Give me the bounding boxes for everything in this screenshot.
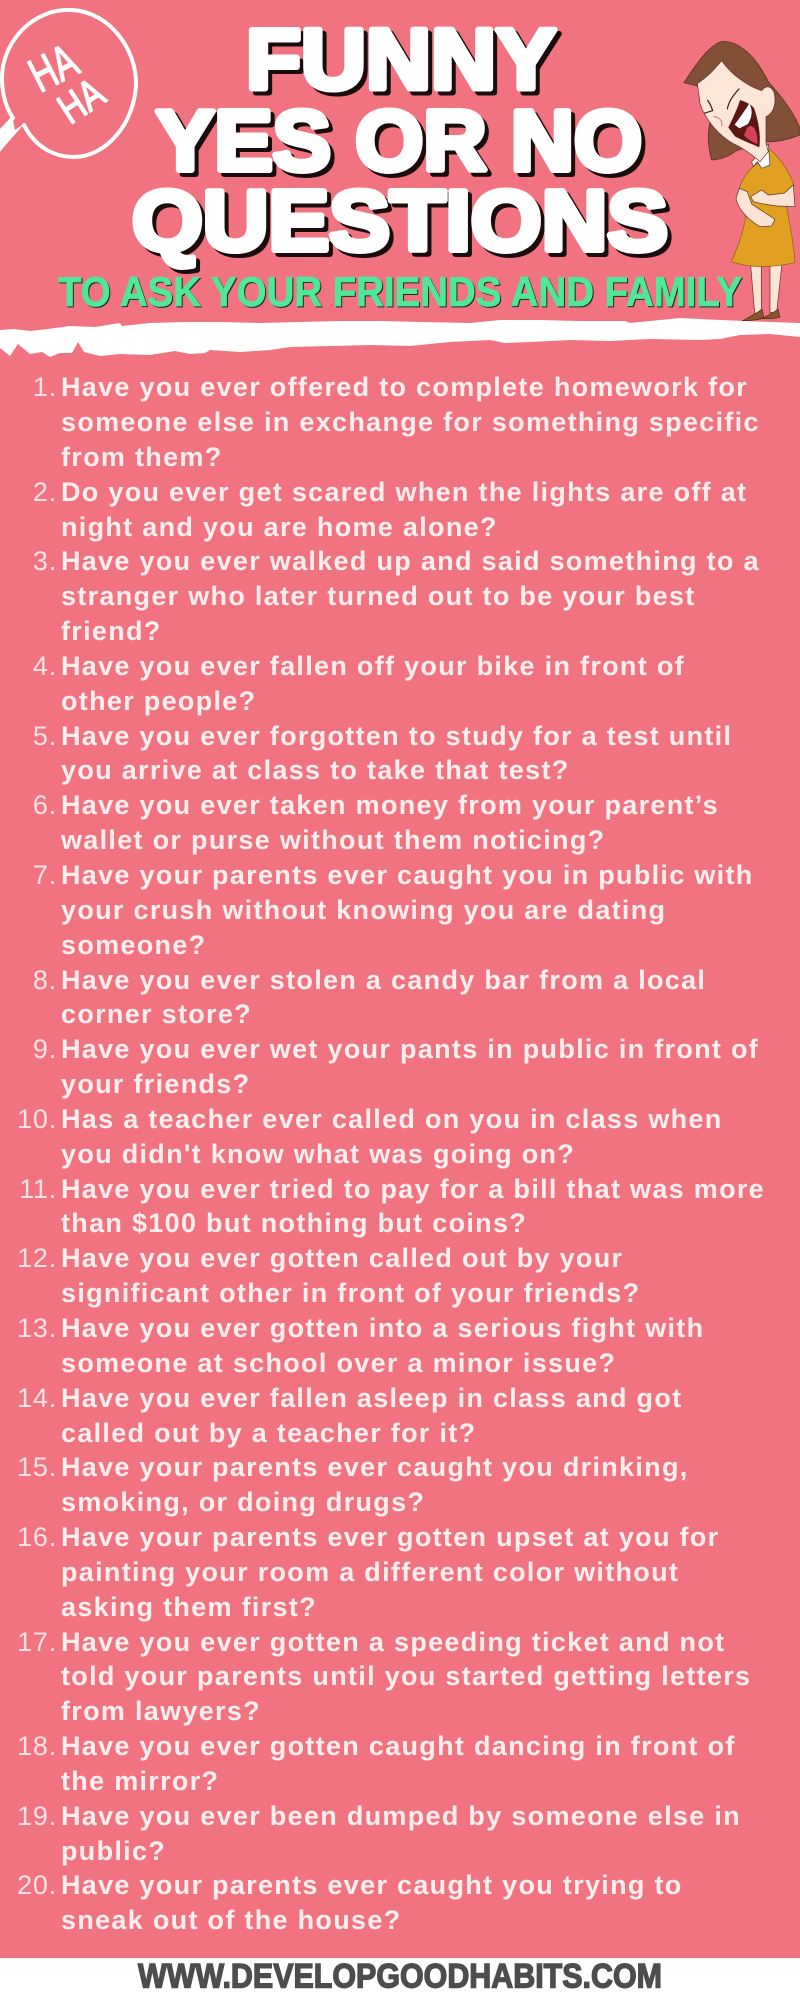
icon: HA HA speech bubble xyxy=(0,10,136,157)
question 10: Has a teacher ever called on you in class when xyxy=(61,1104,723,1134)
question 1: Have you ever offered to complete homework for xyxy=(61,372,748,402)
question 3: stranger who later turned out to be your best xyxy=(61,581,696,611)
question 5: 5. xyxy=(33,721,57,751)
question 8: 8. xyxy=(33,965,57,995)
question 4 xyxy=(33,651,685,716)
question 1 xyxy=(33,372,760,472)
question 9 xyxy=(33,1034,759,1099)
title: QUESTIONS xyxy=(132,174,668,269)
question 12: Have you ever gotten called out by your xyxy=(61,1243,623,1273)
question 15: Have your parents ever caught you drinking, xyxy=(61,1452,689,1482)
header artwork xyxy=(0,8,800,357)
arms xyxy=(736,188,775,227)
torn white paper strip xyxy=(0,318,800,357)
question 20: 20. xyxy=(17,1870,57,1900)
question 9: Have you ever wet your pants in public in front of xyxy=(61,1034,759,1064)
eyes xyxy=(704,89,739,113)
question 7: your crush without knowing you are dating xyxy=(61,895,666,925)
question 12: significant other in front of your friends? xyxy=(61,1278,640,1308)
shoes xyxy=(743,309,780,321)
question 16: asking them first? xyxy=(61,1592,317,1622)
question 19: 19. xyxy=(17,1801,57,1831)
icon: HA HA speech bubble: HA xyxy=(20,32,87,102)
question 16: painting your room a different color without xyxy=(61,1557,679,1587)
question 20 xyxy=(17,1870,683,1935)
question 7: someone? xyxy=(61,930,206,960)
question 11: Have you ever tried to pay for a bill that was more xyxy=(61,1174,765,1204)
question 15 xyxy=(17,1452,689,1517)
question 1: from them? xyxy=(61,442,222,472)
question 17 xyxy=(17,1627,751,1726)
question 17: Have you ever gotten a speeding ticket and not xyxy=(61,1627,725,1657)
question 13: someone at school over a minor issue? xyxy=(61,1348,616,1378)
question 7: Have your parents ever caught you in public with xyxy=(61,860,754,890)
footer website url: WWW.DEVELOPGOODHABITS.COM xyxy=(138,1958,662,1996)
question 11: than $100 but nothing but coins? xyxy=(61,1208,527,1238)
question 6: wallet or purse without them noticing? xyxy=(61,825,605,855)
title xyxy=(132,12,668,269)
question 7: 7. xyxy=(33,860,57,890)
question 2: Do you ever get scared when the lights are off at xyxy=(61,477,747,507)
question 7 xyxy=(33,860,754,960)
question 10: you didn't know what was going on? xyxy=(61,1139,575,1169)
question 20: Have your parents ever caught you trying to xyxy=(61,1870,683,1900)
questions list xyxy=(17,372,765,1935)
collar xyxy=(752,144,770,168)
question 12: 12. xyxy=(17,1243,57,1273)
question 4: 4. xyxy=(33,651,57,681)
legs xyxy=(751,263,782,313)
question 8 xyxy=(33,965,706,1029)
icon: laughing woman xyxy=(684,41,800,321)
title: FUNNY xyxy=(246,12,556,108)
teeth xyxy=(735,103,752,128)
question 1: 1. xyxy=(33,372,57,402)
question 5: Have you ever forgotten to study for a test until xyxy=(61,721,732,751)
question 10 xyxy=(17,1104,723,1169)
hair xyxy=(684,41,800,160)
dress xyxy=(731,149,795,266)
question 16 xyxy=(17,1522,719,1622)
question 6 xyxy=(33,790,719,855)
question 12 xyxy=(17,1243,640,1308)
question 3: Have you ever walked up and said something to a xyxy=(61,546,760,576)
question 14: called out by a teacher for it? xyxy=(61,1418,476,1448)
question 18: 18. xyxy=(17,1731,57,1761)
question 6: 6. xyxy=(33,790,57,820)
question 3: friend? xyxy=(61,616,162,646)
question 15: 15. xyxy=(17,1452,57,1482)
question 3 xyxy=(33,546,760,646)
question 5 xyxy=(33,721,732,785)
question 8: corner store? xyxy=(61,999,252,1029)
question 19: public? xyxy=(61,1836,166,1866)
question 17: told your parents until you started getting letters xyxy=(61,1661,751,1691)
question 2 xyxy=(33,477,747,542)
question 1: someone else in exchange for something specific xyxy=(61,407,760,437)
mouth xyxy=(728,100,760,147)
question 13 xyxy=(17,1313,704,1378)
tongue xyxy=(744,126,757,144)
question 14 xyxy=(17,1383,682,1448)
question 5: you arrive at class to take that test? xyxy=(61,755,570,785)
subtitle: TO ASK YOUR FRIENDS AND FAMILY xyxy=(58,268,742,315)
question 9: your friends? xyxy=(61,1069,250,1099)
question 18: Have you ever gotten caught dancing in front of xyxy=(61,1731,736,1761)
question 14: Have you ever fallen asleep in class and got xyxy=(61,1383,682,1413)
question 8: Have you ever stolen a candy bar from a local xyxy=(61,965,706,995)
question 13: Have you ever gotten into a serious fight with xyxy=(61,1313,704,1343)
title: YES OR NO xyxy=(156,94,642,189)
question 2: night and you are home alone? xyxy=(61,512,498,542)
face xyxy=(697,61,775,162)
question 3: 3. xyxy=(33,546,57,576)
question 19 xyxy=(17,1801,741,1866)
question 6: Have you ever taken money from your parent’s xyxy=(61,790,719,820)
question 11: 11. xyxy=(19,1174,57,1204)
question 4: Have you ever fallen off your bike in front of xyxy=(61,651,685,681)
question 17: 17. xyxy=(17,1627,57,1657)
question 16: 16. xyxy=(17,1522,57,1552)
question 11 xyxy=(19,1174,765,1238)
question 15: smoking, or doing drugs? xyxy=(61,1487,425,1517)
question 4: other people? xyxy=(61,686,256,716)
question 13: 13. xyxy=(17,1313,57,1343)
icon: HA HA speech bubble: HA xyxy=(49,69,113,133)
question 17: from lawyers? xyxy=(61,1696,261,1726)
question 2: 2. xyxy=(33,477,57,507)
question 14: 14. xyxy=(17,1383,57,1413)
question 18: the mirror? xyxy=(61,1766,219,1796)
question 10: 10. xyxy=(17,1104,57,1134)
question 20: sneak out of the house? xyxy=(61,1905,401,1935)
question 19: Have you ever been dumped by someone else in xyxy=(61,1801,741,1831)
question 18 xyxy=(17,1731,736,1796)
question 16: Have your parents ever gotten upset at you for xyxy=(61,1522,719,1552)
question 9: 9. xyxy=(33,1034,57,1064)
